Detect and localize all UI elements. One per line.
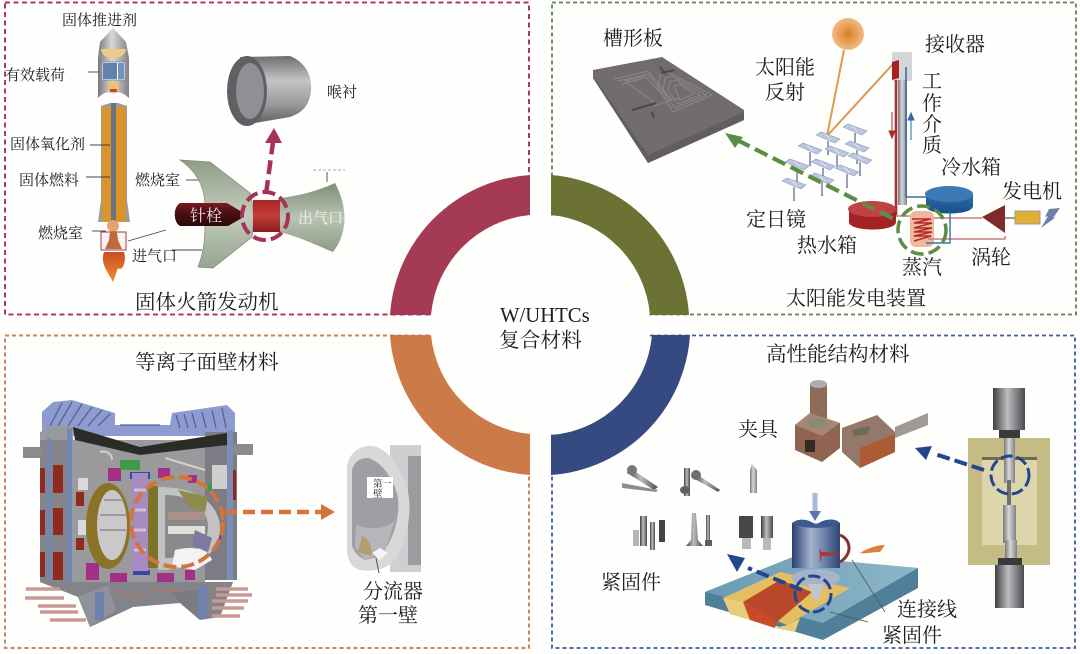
labels: structural materials: 紧固件: [882, 624, 942, 647]
labels: structural materials: [601, 418, 957, 647]
labels: structural materials: 紧固件: [601, 571, 661, 594]
first wall inset: 一: [382, 480, 392, 490]
heading: 高性能结构材料: [766, 343, 910, 366]
labels: divertor and first wall: 第一壁: [358, 604, 418, 627]
nozzle: [175, 160, 344, 268]
hot water tank: [848, 201, 896, 230]
central ring: [390, 175, 690, 475]
panel: solid rocket motor: [5, 2, 529, 314]
steam coil loop: [896, 211, 1005, 247]
tokamak cutaway: [23, 400, 253, 627]
first wall inset: 壁: [373, 488, 383, 500]
arc: blue: [551, 335, 690, 475]
dashed highlight and arrow: [242, 128, 288, 240]
labels: solar device: 介: [922, 113, 942, 136]
arc: red: [390, 175, 530, 315]
arc: olive: [551, 175, 689, 315]
panel: solar power device: [552, 2, 1076, 314]
labels: solar device: 热水箱: [797, 234, 857, 257]
labels: solid rocket motor: [5, 12, 357, 314]
labels: solar device: 发电机: [1002, 180, 1062, 203]
labels: divertor and first wall: [358, 580, 423, 627]
panel border blue: [552, 336, 1075, 648]
ring center mask: [420, 190, 660, 460]
center title: [499, 305, 590, 352]
labels: solid rocket motor: 固体氧化剂: [10, 136, 85, 153]
dashed highlights and arrows: [727, 446, 1029, 612]
labels: solid rocket motor: 固体火箭发动机: [135, 291, 278, 314]
labels: solid rocket motor: 喉衬: [327, 84, 357, 101]
labels: solid rocket motor: 有效载荷: [5, 66, 65, 84]
labels: solar device: 蒸汽: [902, 256, 942, 279]
dashed highlight and arrow: [131, 477, 335, 567]
labels: solar device: 定日镜: [746, 208, 806, 231]
labels: solid rocket motor: 燃烧室: [38, 224, 83, 242]
first wall inset: 第: [373, 478, 383, 490]
labels: divertor and first wall: 分流器: [363, 580, 423, 603]
heliostat field: [782, 124, 872, 201]
labels: solid rocket motor: 出气口: [298, 210, 343, 227]
sun and reflected rays: [827, 18, 893, 136]
panel border green: [552, 2, 1076, 314]
center title: 复合材料: [499, 329, 582, 352]
panel border orange: [5, 336, 529, 648]
heading: 等离子面壁材料: [135, 351, 279, 374]
labels: solar device: 太阳能: [755, 56, 815, 79]
labels: solid rocket motor: 针栓: [190, 207, 222, 225]
receiver tower and pipes: [880, 52, 928, 214]
trough plate: [593, 57, 744, 163]
tensile fixture: [968, 388, 1050, 608]
labels: solar device: 槽形板: [603, 27, 663, 50]
labels: solar device: 反射: [765, 81, 805, 104]
arc: orange: [390, 335, 530, 475]
labels: structural materials: 夹具: [738, 418, 779, 441]
dashed highlight and arrow: [725, 133, 946, 254]
clamps: [795, 380, 928, 468]
labels: solar device: 工: [922, 71, 942, 93]
panel: high performance structural materials: [552, 336, 1075, 648]
rocket: [98, 28, 130, 282]
first wall inset: [347, 445, 421, 573]
labels: solar device: 涡轮: [971, 246, 1011, 269]
labels: solid rocket motor: 固体燃料: [19, 172, 79, 189]
center title: W/UHTCs: [500, 305, 590, 327]
cold water tank: [925, 186, 973, 214]
labels: solid rocket motor: 固体推进剂: [62, 12, 137, 29]
panel: plasma facing materials: [5, 336, 529, 648]
labels: solar device: [603, 27, 1062, 310]
labels: structural materials: 连接线: [897, 598, 957, 621]
labels: solar device: 接收器: [925, 33, 985, 56]
labels: solar device: 作: [922, 92, 942, 115]
labels: solar device: 太阳能发电装置: [786, 287, 926, 310]
labels: solar device: 质: [922, 134, 942, 157]
labels: solid rocket motor: 进气口: [132, 248, 177, 265]
labels: solar device: 冷水箱: [941, 156, 1001, 179]
fasteners: [622, 464, 773, 550]
leader lines: [86, 72, 345, 250]
labels: solid rocket motor: 燃烧室: [135, 171, 180, 189]
turbine and generator: [982, 205, 1060, 233]
friction stir diagram: [705, 493, 918, 640]
panel border red: [5, 2, 529, 314]
throat liner: [227, 56, 311, 126]
